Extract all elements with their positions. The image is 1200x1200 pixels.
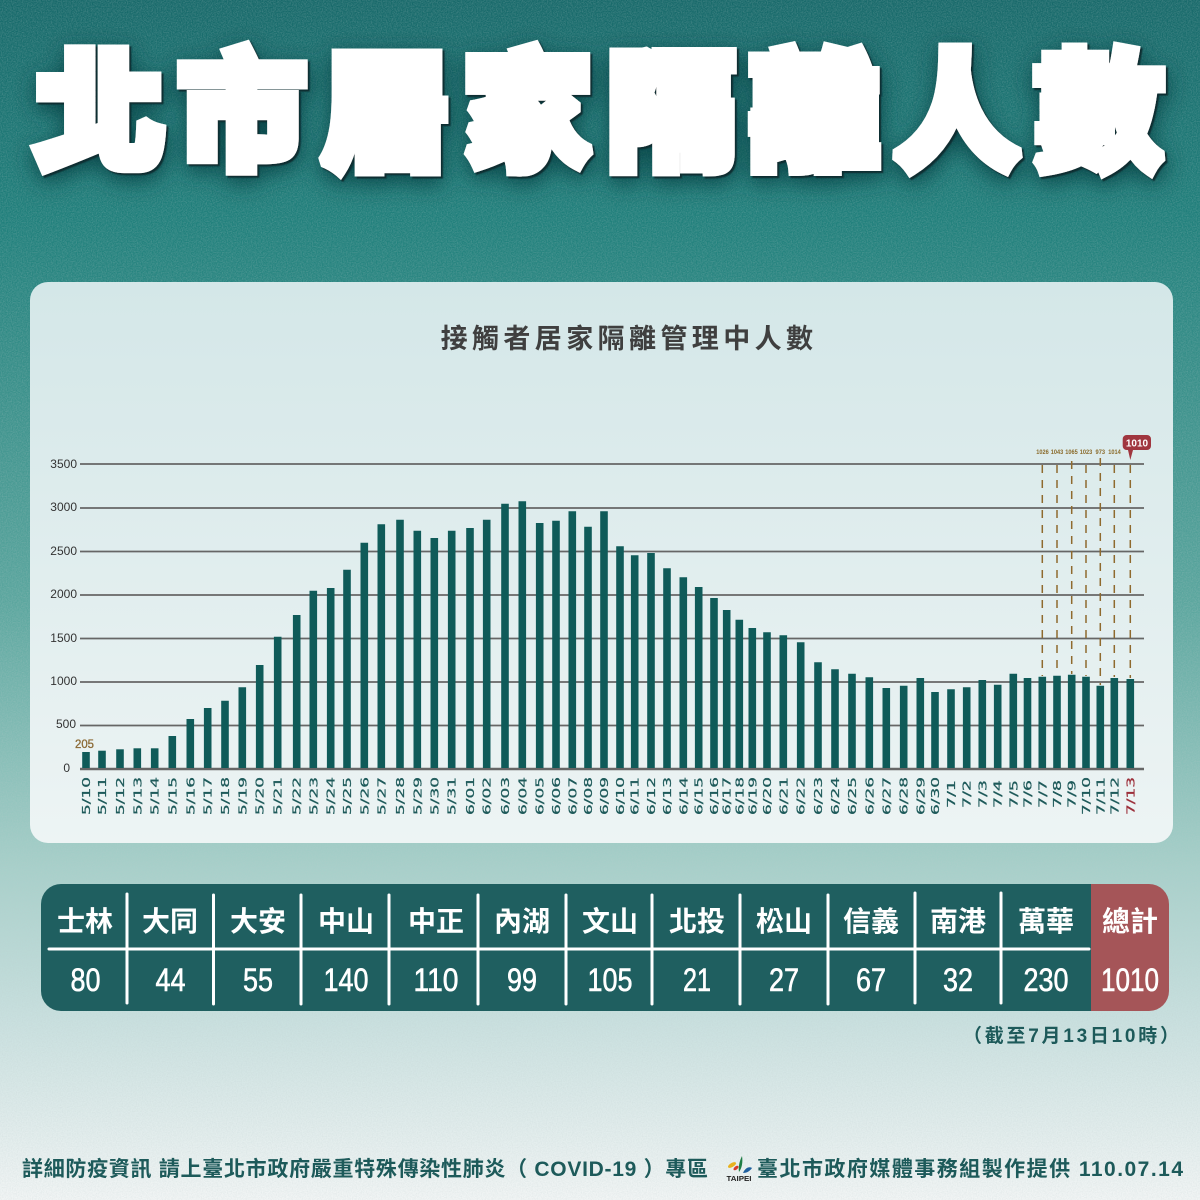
- x axis date labels: 6/18: [733, 777, 746, 815]
- table header row: 總計: [1102, 900, 1158, 940]
- x axis date labels: 5/11: [96, 777, 109, 815]
- table value row: 67: [856, 962, 886, 998]
- panel background: [30, 282, 1173, 843]
- x axis date labels: 5/24: [325, 777, 338, 815]
- x axis date labels: 6/09: [598, 777, 611, 815]
- x axis date labels: 5/26: [358, 777, 371, 815]
- title: 隔: [608, 10, 736, 195]
- y axis labels: 0: [63, 761, 70, 775]
- y axis labels: 3500: [50, 457, 77, 471]
- x axis date labels: 7/11: [1094, 777, 1107, 815]
- x axis date labels: 5/27: [375, 777, 388, 815]
- x axis date labels: 5/12: [114, 777, 127, 815]
- y axis labels: 2500: [50, 544, 77, 558]
- table header row: 內湖: [494, 900, 550, 940]
- x axis date labels: 7/6: [1022, 780, 1034, 808]
- x axis date labels: 7/3: [976, 780, 989, 808]
- x axis date labels: 6/03: [499, 777, 512, 815]
- x axis date labels: 6/02: [481, 777, 494, 815]
- title: 離: [750, 10, 878, 195]
- title: 北: [35, 10, 164, 195]
- table header row: 士林: [57, 900, 113, 940]
- table value row: 55: [243, 962, 273, 998]
- table value row: 140: [324, 962, 368, 998]
- title: 數: [1035, 10, 1163, 195]
- x axis date labels: 6/04: [516, 777, 529, 815]
- title: 家: [463, 10, 592, 195]
- x axis date labels: 5/18: [219, 777, 232, 815]
- x axis date labels: 7/4: [992, 780, 1005, 808]
- x axis date labels: 6/22: [795, 777, 808, 815]
- x axis date labels: 5/20: [254, 777, 267, 815]
- recent-day dashed markers: 1014: [1108, 449, 1121, 456]
- y axis labels: 3000: [50, 500, 77, 514]
- title: 市: [178, 10, 306, 195]
- x axis date labels: 6/30: [929, 777, 942, 815]
- table header row: 中山: [318, 900, 374, 940]
- grid lines: [80, 464, 1144, 769]
- recent-day dashed markers: 1065: [1065, 449, 1078, 456]
- table header row: 中正: [408, 900, 464, 940]
- recent-day dashed markers: [1036, 449, 1130, 685]
- x axis date labels: 6/19: [746, 777, 759, 815]
- icon: Taipei logo: [726, 1156, 752, 1183]
- callout: latest value 1010: [1123, 435, 1151, 460]
- table background: [41, 884, 1091, 1011]
- table header row: [57, 900, 1158, 940]
- footer: info link text: 詳細防疫資訊 請上臺北市政府嚴重特殊傳染性肺炎（ COVID-19 ）專區: [22, 1157, 708, 1181]
- x axis date labels: 7/1: [945, 780, 958, 808]
- x axis date labels: 6/23: [812, 777, 825, 815]
- footer: producer and date: 臺北市政府媒體事務組製作提供 110.07.14: [757, 1157, 1183, 1181]
- x axis date labels: 5/23: [307, 777, 320, 815]
- x axis date labels: 6/20: [761, 777, 774, 815]
- callout: latest value 1010: 1010: [1126, 438, 1149, 450]
- bar chart: [86, 501, 1130, 768]
- recent-day dashed markers: 1043: [1051, 449, 1064, 456]
- x axis date labels: 5/29: [411, 777, 424, 815]
- first bar value: 205: [75, 737, 94, 751]
- title: [35, 10, 1163, 195]
- table header row: 南港: [930, 900, 986, 940]
- table value row: 21: [683, 962, 711, 998]
- x axis date labels: 5/22: [291, 777, 304, 815]
- x axis date labels: 6/10: [614, 777, 627, 815]
- x axis date labels: 5/25: [341, 777, 354, 815]
- table header row: 信義: [843, 900, 899, 940]
- x axis date labels: 7/13: [1124, 777, 1137, 815]
- footer: [22, 1156, 1183, 1183]
- table value row: [70, 962, 1159, 998]
- x axis date labels: 7/12: [1108, 777, 1121, 815]
- x axis date labels: 6/07: [566, 777, 579, 815]
- table value row: 80: [70, 962, 100, 998]
- y axis labels: 1500: [50, 631, 77, 645]
- x axis date labels: 6/29: [914, 777, 927, 815]
- table value row: 110: [414, 962, 458, 998]
- x axis date labels: 6/24: [829, 777, 842, 815]
- table value row: 27: [769, 962, 799, 998]
- x axis date labels: 5/30: [428, 777, 441, 815]
- x axis date labels: 6/06: [550, 777, 563, 815]
- icon: Taipei logo: TAIPEI: [726, 1174, 752, 1183]
- table value row: 32: [943, 962, 973, 998]
- table: district counts: [41, 884, 1169, 1011]
- y axis labels: 2000: [50, 587, 77, 601]
- x axis date labels: 6/08: [582, 777, 595, 815]
- x axis date labels: 7/5: [1007, 780, 1020, 808]
- table header row: 北投: [669, 900, 725, 940]
- y axis labels: 500: [56, 717, 76, 731]
- table header row: 松山: [756, 900, 812, 940]
- x axis date labels: 6/05: [534, 777, 547, 815]
- table value row: 44: [156, 962, 186, 998]
- recent-day dashed markers: 1026: [1036, 449, 1049, 456]
- x axis date labels: 5/15: [166, 777, 179, 815]
- table value row: 230: [1024, 962, 1068, 998]
- x axis date labels: 5/13: [131, 777, 144, 815]
- x axis date labels: 5/21: [272, 777, 285, 815]
- x axis date labels: 5/28: [394, 777, 407, 815]
- recent-day dashed markers: 973: [1096, 449, 1105, 456]
- x axis date labels: 6/26: [863, 777, 876, 815]
- x axis date labels: 7/2: [961, 780, 974, 808]
- table value row: 1010: [1101, 962, 1159, 998]
- panel: chart: [30, 282, 1173, 843]
- total column background: [1091, 884, 1169, 1011]
- table header row: 文山: [582, 900, 638, 940]
- x axis date labels: 7/9: [1066, 780, 1079, 808]
- y axis labels: [50, 457, 77, 775]
- x axis date labels: 5/19: [236, 777, 249, 815]
- x axis date labels: 6/14: [677, 777, 690, 815]
- table value row: 105: [588, 962, 632, 998]
- x axis date labels: 7/7: [1036, 780, 1049, 808]
- x axis date labels: 5/10: [80, 777, 93, 815]
- table rules: [49, 893, 1089, 1004]
- table header row: 大同: [142, 900, 198, 940]
- x axis date labels: 7/10: [1080, 777, 1093, 815]
- title: 居: [321, 10, 449, 195]
- data cut-off note: （截至7月13日10時）: [963, 1025, 1179, 1047]
- x axis date labels: 6/01: [464, 777, 477, 815]
- table header row: 萬華: [1018, 900, 1074, 940]
- table header row: 大安: [230, 900, 286, 940]
- x axis date labels: 6/11: [629, 777, 642, 815]
- x axis date labels: 5/14: [149, 777, 162, 815]
- x axis date labels: 6/28: [898, 777, 911, 815]
- title: 人: [893, 10, 1021, 195]
- x axis date labels: 5/16: [184, 777, 197, 815]
- table value row: 99: [507, 962, 537, 998]
- x axis date labels: 6/12: [645, 777, 658, 815]
- recent-day dashed markers: 1023: [1080, 449, 1093, 456]
- chart heading: 接觸者居家隔離管理中人數: [441, 324, 817, 354]
- x axis date labels: 6/17: [721, 777, 734, 815]
- x axis date labels: 6/25: [846, 777, 859, 815]
- x axis date labels: 6/27: [880, 777, 893, 815]
- x axis date labels: 6/16: [708, 777, 721, 815]
- x axis date labels: [80, 777, 1137, 815]
- x axis date labels: 6/13: [661, 777, 674, 815]
- x axis date labels: 5/17: [202, 777, 215, 815]
- x axis date labels: 7/8: [1051, 780, 1064, 808]
- x axis date labels: 6/21: [777, 777, 790, 815]
- x axis date labels: 6/15: [693, 777, 706, 815]
- x axis date labels: 5/31: [446, 777, 459, 815]
- y axis labels: 1000: [50, 674, 77, 688]
